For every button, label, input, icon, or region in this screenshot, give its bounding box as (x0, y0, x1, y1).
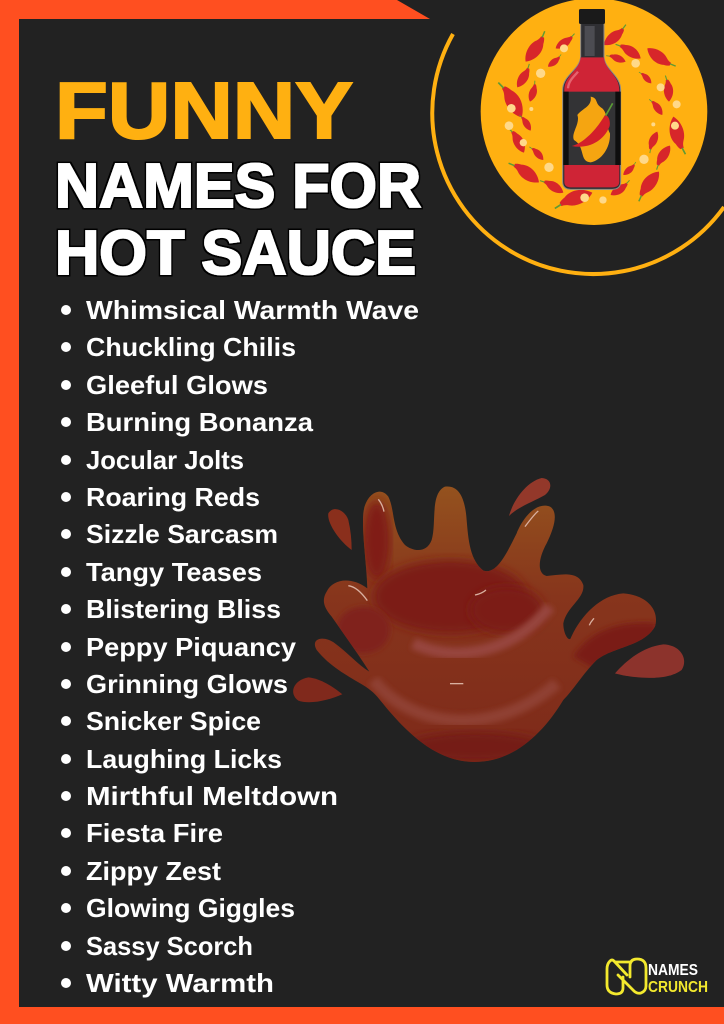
splash shading (337, 500, 657, 762)
logo: Names Crunch (607, 959, 708, 996)
decorative arc around circle (432, 34, 724, 274)
item: Fiesta Fire (86, 818, 223, 848)
item: Blistering Bliss (86, 594, 281, 624)
pale pepper flecks (505, 44, 681, 204)
item: Witty Warmth (86, 968, 274, 998)
item: Snicker Spice (86, 706, 261, 736)
bottle label (563, 92, 621, 165)
icon: hot sauce bottle on yellow circle (481, 0, 707, 225)
item: Glowing Giggles (86, 893, 295, 923)
bottle glass (563, 23, 621, 189)
chili ring (498, 24, 686, 209)
item: Laughing Licks (86, 744, 282, 774)
list of names (61, 295, 419, 998)
splash droplets (328, 509, 352, 550)
item: Burning Bonanza (86, 407, 314, 437)
item: Grinning Glows (86, 669, 288, 699)
logo word CRUNCH: CRUNCH (648, 979, 708, 996)
item: Sassy Scorch (86, 931, 253, 961)
title line: NAMES FOR: NAMES FOR (55, 152, 421, 221)
splash glints (348, 499, 594, 684)
logo word NAMES: NAMES (648, 962, 698, 979)
sauce splash (293, 478, 684, 762)
logo icon (607, 959, 646, 994)
title line: HOT SAUCE: HOT SAUCE (55, 219, 416, 288)
sauce fill (564, 57, 619, 187)
main splash body (315, 487, 656, 762)
item: Zippy Zest (86, 856, 221, 886)
item: Chuckling Chilis (86, 332, 296, 362)
item: Sizzle Sarcasm (86, 519, 278, 549)
item: Whimsical Warmth Wave (86, 295, 419, 325)
item: Peppy Piquancy (86, 632, 297, 662)
yellow circle (481, 0, 707, 225)
title (55, 66, 421, 288)
item: Roaring Reds (86, 482, 260, 512)
bottle cap (579, 9, 605, 24)
item: Tangy Teases (86, 557, 262, 587)
neck highlight (585, 26, 595, 56)
item: Jocular Jolts (86, 445, 244, 475)
title line: FUNNY: FUNNY (55, 66, 353, 155)
item: Gleeful Glows (86, 370, 268, 400)
item: Mirthful Meltdown (86, 781, 338, 811)
shoulder highlight (568, 72, 578, 88)
label chili (572, 115, 610, 147)
label flame (573, 97, 610, 162)
